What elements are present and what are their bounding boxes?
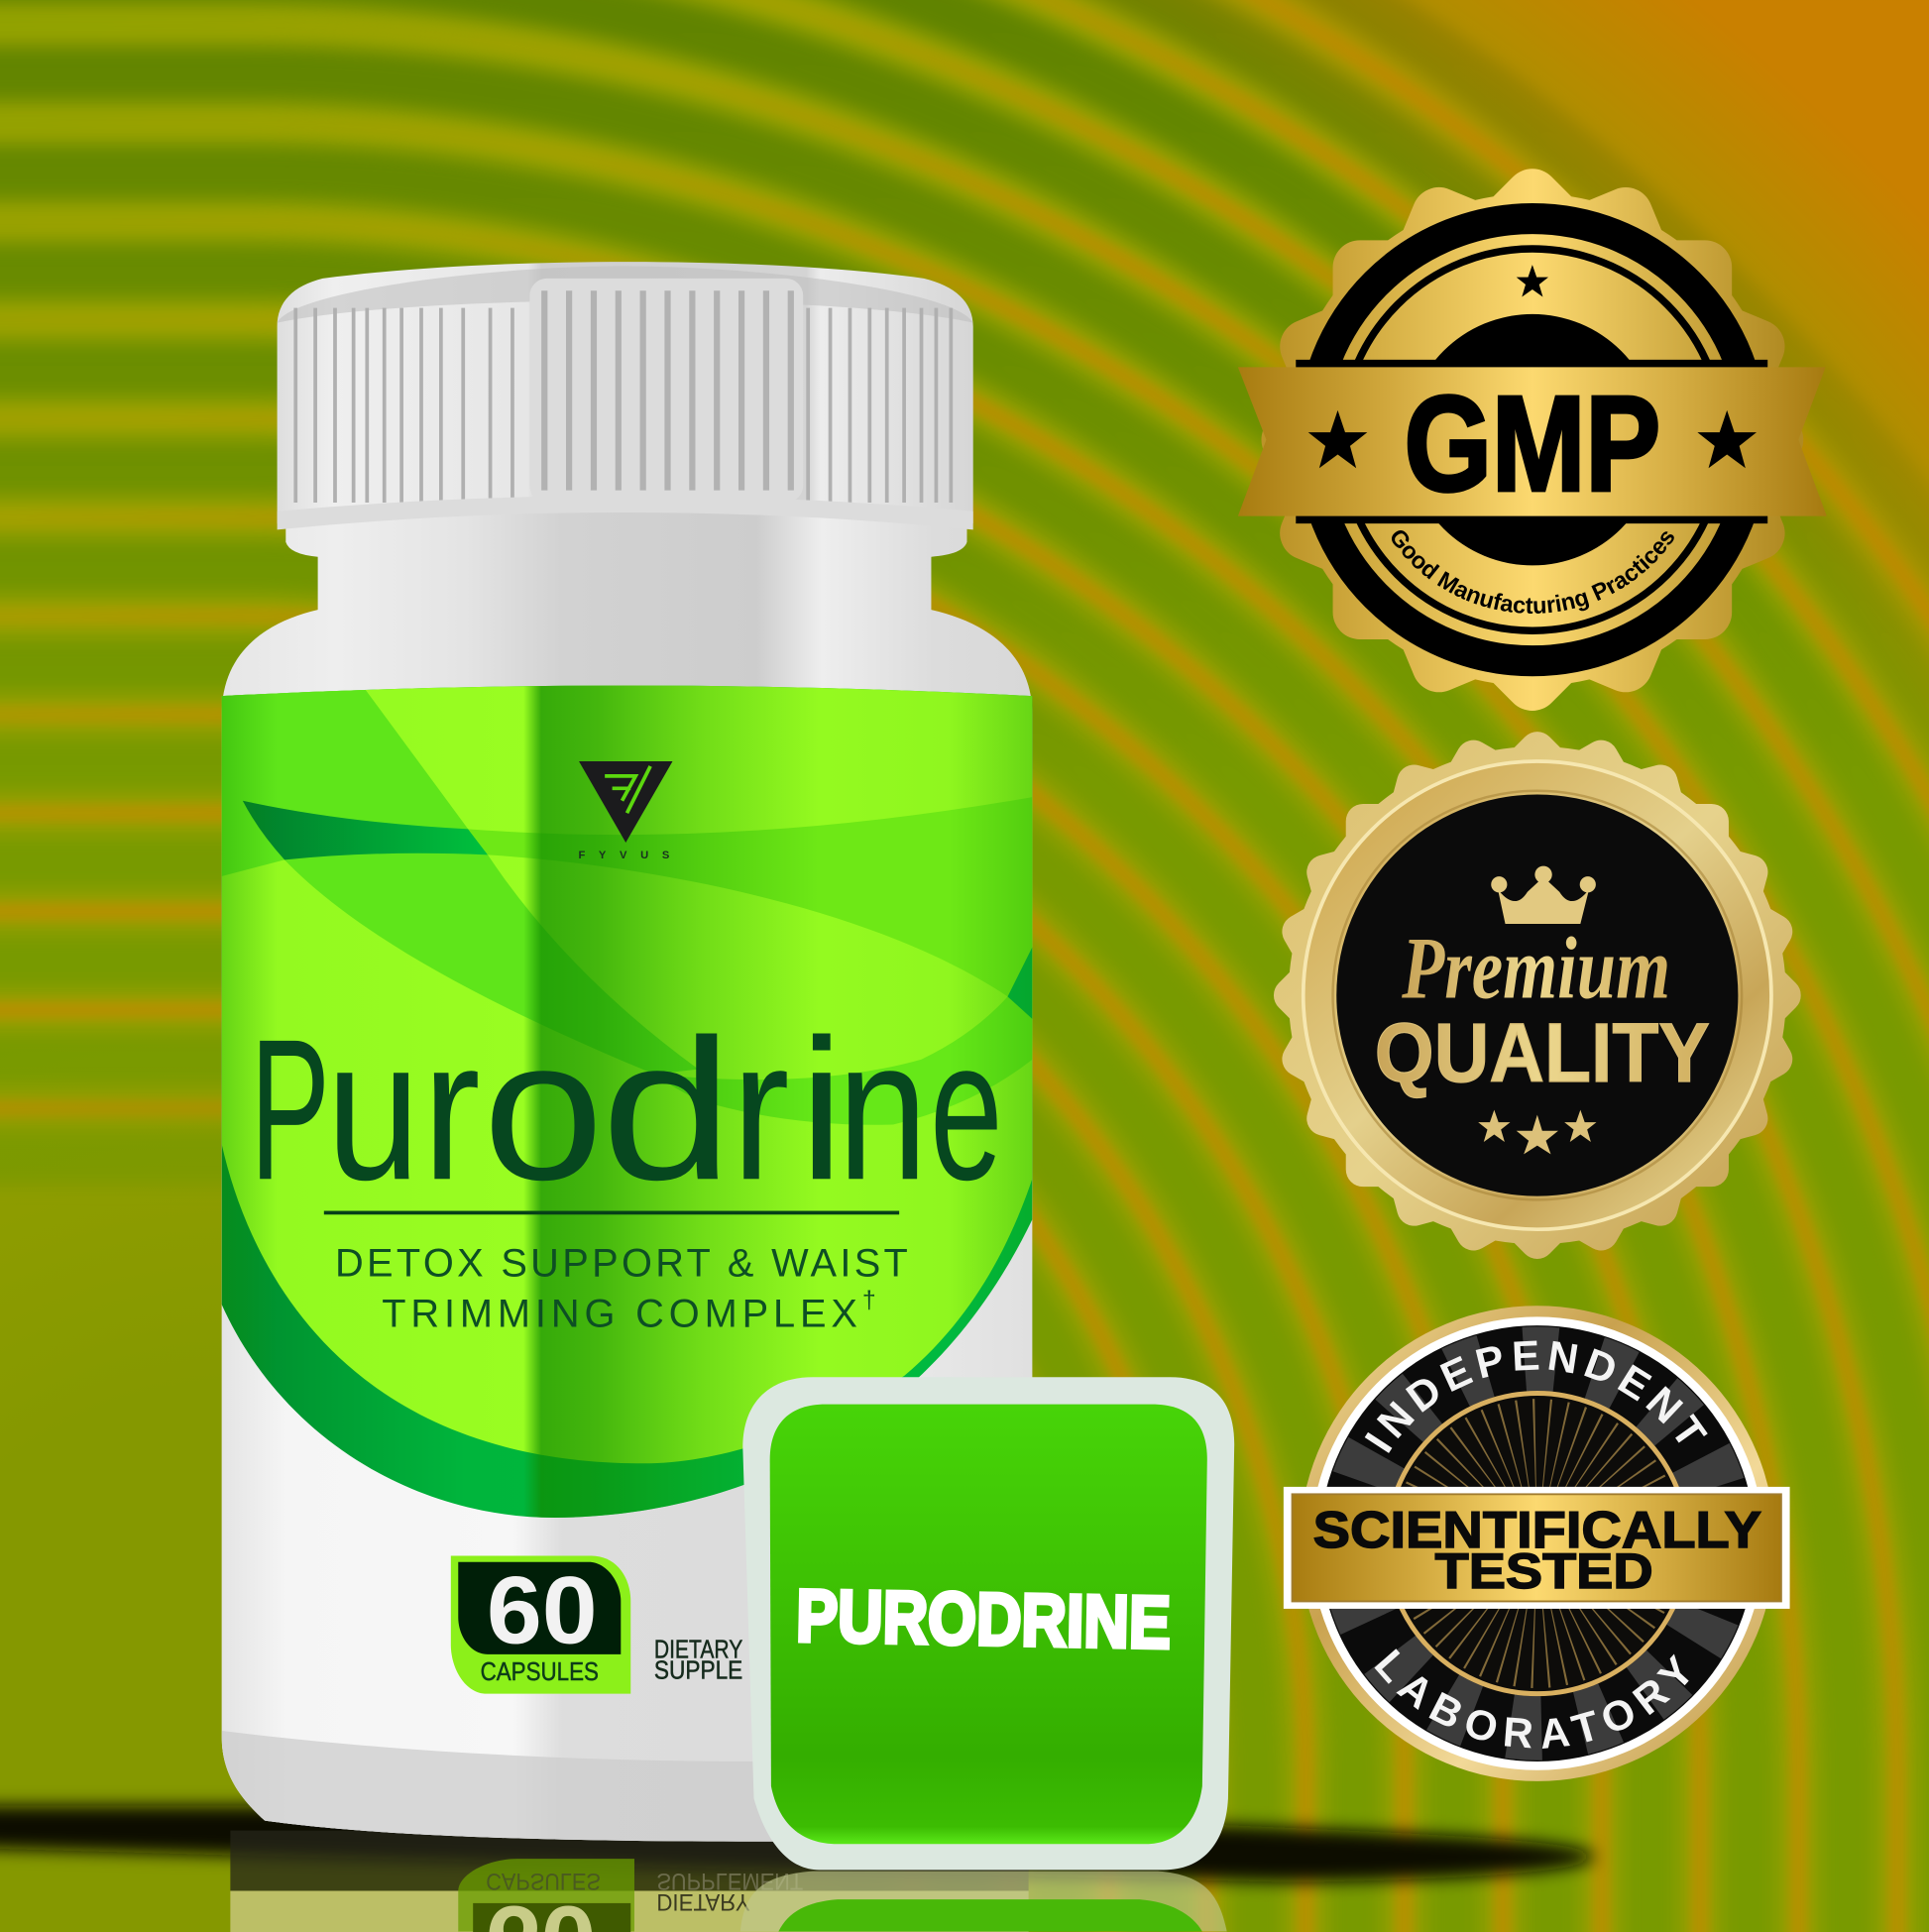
GMP rings [1311, 219, 1754, 661]
bottle base shading [222, 1731, 773, 1842]
product name: P [250, 997, 330, 1221]
product name: d [601, 997, 733, 1221]
dietary supplement text: DIETARY [654, 1635, 742, 1664]
GMP ribbon [1238, 367, 1827, 516]
lab seal sunburst [1457, 1463, 1618, 1624]
badge: GMP [1238, 169, 1827, 711]
tagline [335, 1241, 908, 1335]
premium script: Premium [1401, 920, 1670, 1018]
bottle neck lip [285, 499, 966, 557]
brand logo: Fyvus [578, 761, 683, 861]
badge: independent laboratory [1283, 1306, 1790, 1781]
rule under name [324, 1211, 899, 1214]
reflection: capsule badge [458, 1859, 634, 1932]
premium stars [1478, 1110, 1596, 1154]
label: right accent [1007, 948, 1033, 1019]
tagline: † [862, 1288, 876, 1314]
label: highlight edges [525, 686, 795, 1518]
label: mid green band [468, 795, 1047, 1032]
GMP ribbon stars [1308, 410, 1757, 468]
lab banner text line 2: TESTED [1435, 1543, 1653, 1599]
label: lower green band [654, 996, 1047, 1125]
reflection: dietary supplement text [656, 1868, 803, 1914]
dietary supplement text: SUPPLE [654, 1655, 742, 1685]
quality wordmark: QUALITY [1375, 1006, 1710, 1099]
dietary supplement text [654, 1635, 742, 1685]
reflection: capsule badge: CAPSULES [486, 1868, 601, 1893]
tagline: TRIMMING COMPLEX [382, 1292, 857, 1335]
product name: i [799, 997, 844, 1221]
premium scalloped seal [1257, 715, 1818, 1276]
product name: u [326, 997, 420, 1221]
reflection: pill box [740, 1872, 1227, 1931]
lab seal top text: INDEPENDENT [1364, 1340, 1708, 1453]
pill box [742, 1377, 1234, 1870]
premium rings [1304, 761, 1771, 1229]
pill box green face [770, 1405, 1207, 1844]
GMP curved caption: Good Manufacturing Practices [1392, 530, 1674, 614]
pill box name: PURODRINE [795, 1574, 1172, 1663]
label: left green wedge [209, 665, 699, 1075]
brand logo: Fyvus: FYVUS [578, 850, 683, 861]
product name: r [732, 997, 790, 1221]
floor reflection [230, 1831, 1227, 1932]
lab seal bottom text: LABORATORY [1374, 1648, 1689, 1749]
product name: o [483, 997, 604, 1221]
reflection: dietary supplement text: DIETARY [656, 1888, 750, 1914]
bottle neck [318, 493, 931, 640]
tagline: DETOX SUPPORT & WAIST [335, 1241, 908, 1285]
product bottle [209, 262, 1047, 1848]
lab banner [1284, 1487, 1790, 1609]
product name: n [838, 997, 928, 1221]
icon: crown [1491, 866, 1596, 924]
bottle body [222, 610, 1032, 1842]
floor shadow [0, 1806, 1595, 1882]
badge: premium quality [1257, 715, 1818, 1276]
bottle lower white body [222, 1108, 1032, 1848]
label: lime body [209, 665, 1047, 1463]
label: dark green band [243, 801, 488, 859]
GMP wordmark: GMP [1405, 368, 1660, 519]
premium black disc [1336, 795, 1738, 1196]
label: green wrap [209, 665, 1047, 1539]
lab banner text line 1: SCIENTIFICALLY [1313, 1502, 1761, 1559]
GMP top star [1517, 265, 1548, 296]
reflection: dietary supplement text: SUPPLEMENT [656, 1868, 803, 1893]
GMP black bars behind ribbon [1296, 360, 1767, 523]
GMP scalloped seal [1261, 169, 1804, 711]
product name: r [422, 997, 481, 1221]
lab seal grey segments [1352, 1359, 1722, 1728]
bottle cap [278, 262, 973, 529]
product name: e [930, 997, 1003, 1221]
capsule count badge: CAPSULES [481, 1656, 599, 1686]
lab seal gold ring [1300, 1306, 1775, 1781]
capsule count badge [451, 1555, 630, 1694]
lab seal inner circle [1387, 1393, 1687, 1694]
capsule count badge: 60 [487, 1556, 598, 1664]
